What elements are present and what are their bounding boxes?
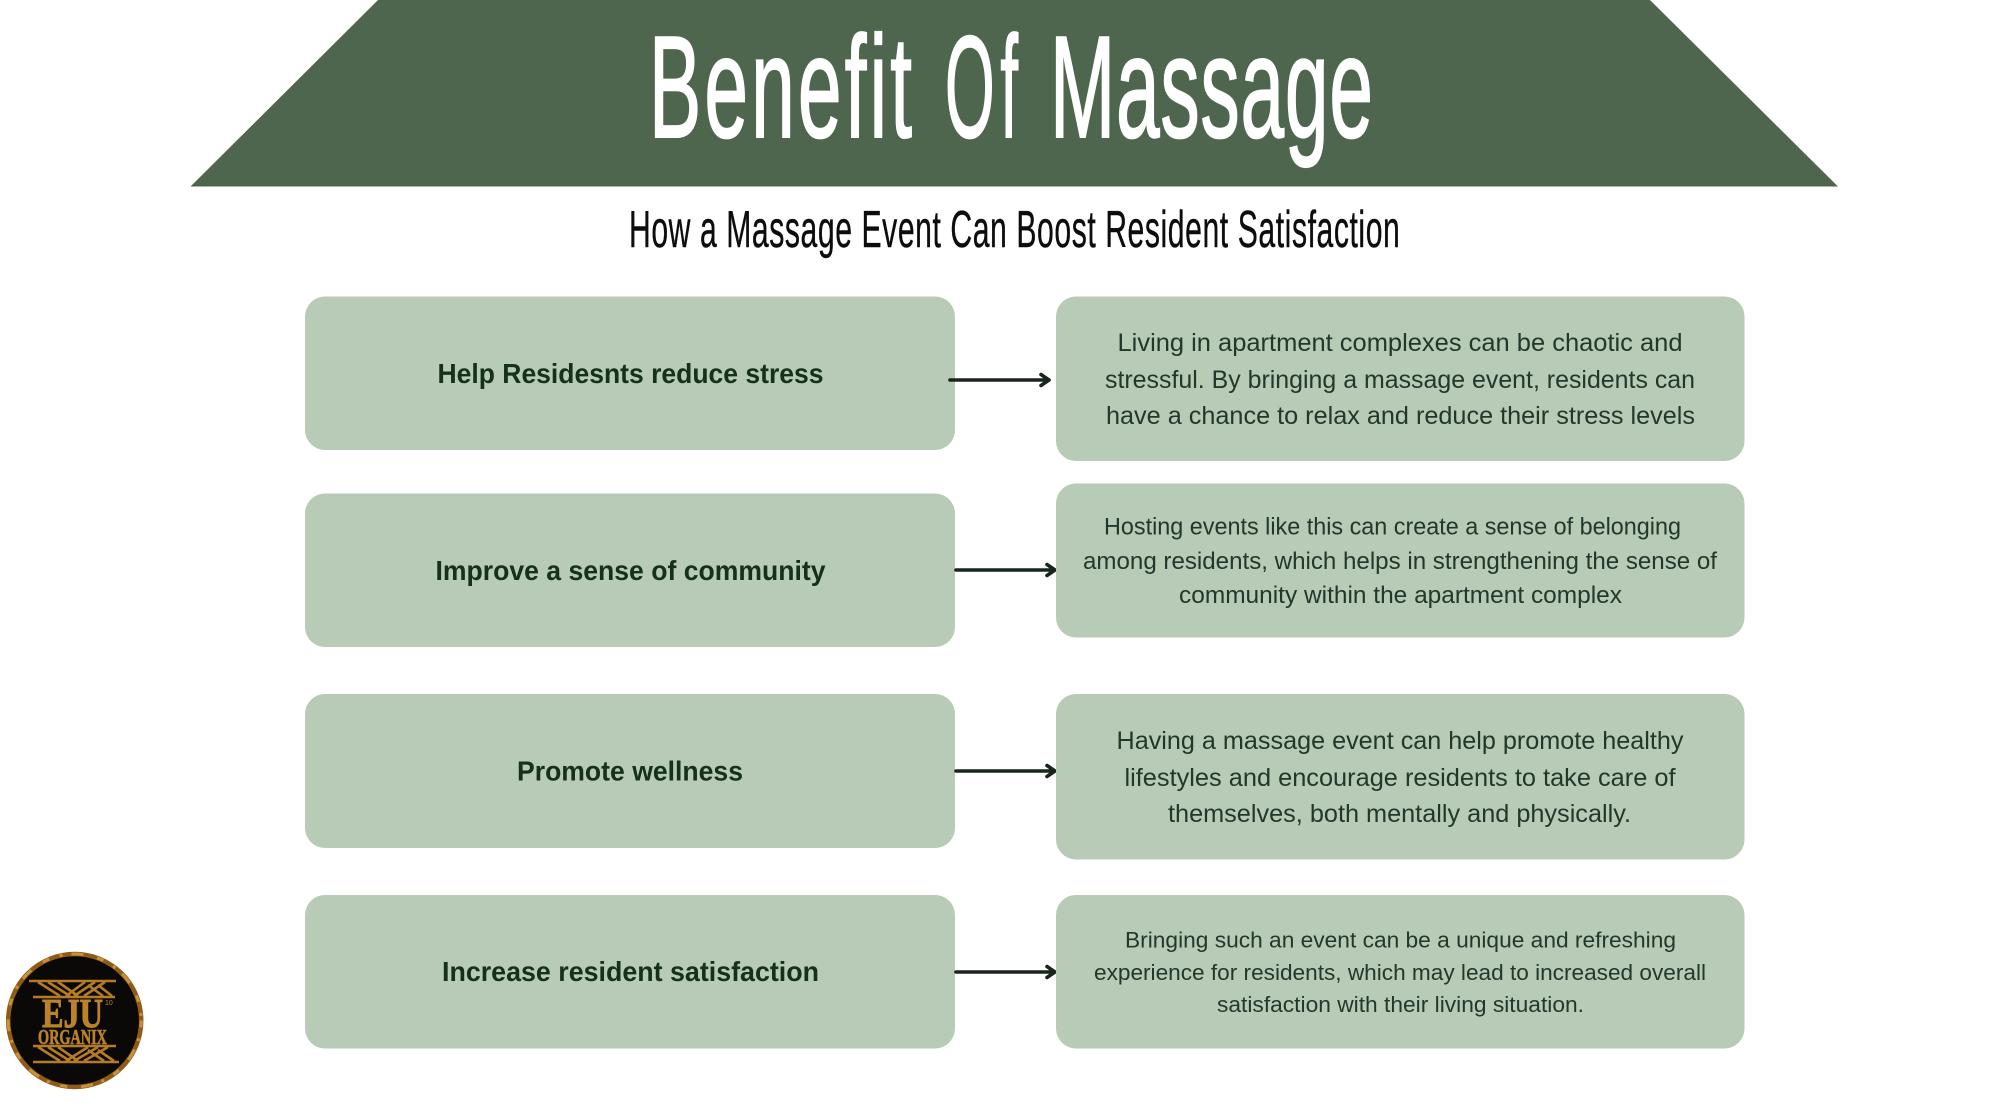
title xyxy=(649,6,1373,168)
title: Massage xyxy=(1050,6,1373,168)
description box 3: Having a massage event can help promote healthy xyxy=(1116,727,1684,755)
description box 1: have a chance to relax and reduce their stress levels xyxy=(1106,402,1695,430)
description box 2: among residents, which helps in strengthening the sense of xyxy=(1083,548,1717,575)
row 3: promote wellness xyxy=(305,694,1744,860)
description box 4 xyxy=(1056,895,1744,1048)
description box 1: Living in apartment complexes can be chaotic and xyxy=(1118,329,1682,357)
label box 3 xyxy=(305,694,955,848)
description box 3: lifestyles and encourage residents to take care of xyxy=(1124,764,1676,792)
description box 4: satisfaction with their living situation. xyxy=(1217,992,1584,1017)
description box 2: community within the apartment complex xyxy=(1179,582,1622,609)
description box 4: experience for residents, which may lead to increased overall xyxy=(1094,960,1706,985)
row 2: sense of community xyxy=(305,484,1744,647)
description box 4: Bringing such an event can be a unique and refreshing xyxy=(1125,928,1676,952)
label box 1: Help Residesnts reduce stress xyxy=(438,358,824,389)
description box 1: stressful. By bringing a massage event, residents can xyxy=(1105,366,1695,394)
logo: EJU Organix badge: 10 xyxy=(105,1000,113,1007)
arrow 2 xyxy=(956,564,1055,576)
label box 1 xyxy=(305,296,955,450)
title: Benefit xyxy=(649,6,912,168)
label box 3: Promote wellness xyxy=(517,756,743,786)
subtitle: How a Massage Event Can Boost Resident Satisfaction xyxy=(629,202,1400,259)
title: Of xyxy=(945,6,1019,168)
row 1: reduce stress xyxy=(305,296,1744,461)
header banner trapezoid xyxy=(190,0,1838,186)
arrow 1 xyxy=(950,374,1049,386)
row 4: resident satisfaction xyxy=(305,895,1744,1048)
description box 2 xyxy=(1056,484,1744,638)
label box 4 xyxy=(305,895,955,1048)
description box 2: Hosting events like this can create a sense of belonging xyxy=(1104,514,1681,540)
logo: EJU Organix badge: EJU xyxy=(42,990,103,1036)
description box 3: themselves, both mentally and physically. xyxy=(1168,800,1631,828)
arrow 3 xyxy=(956,766,1055,776)
logo: EJU Organix badge: ORGANIX xyxy=(38,1025,107,1049)
label box 2 xyxy=(305,494,955,647)
logo: EJU Organix badge xyxy=(8,954,141,1087)
label box 2: Improve a sense of community xyxy=(436,555,826,586)
label box 4: Increase resident satisfaction xyxy=(442,956,819,987)
description box 3 xyxy=(1056,694,1744,860)
description box 1 xyxy=(1056,296,1744,461)
arrow 4 xyxy=(956,966,1055,978)
